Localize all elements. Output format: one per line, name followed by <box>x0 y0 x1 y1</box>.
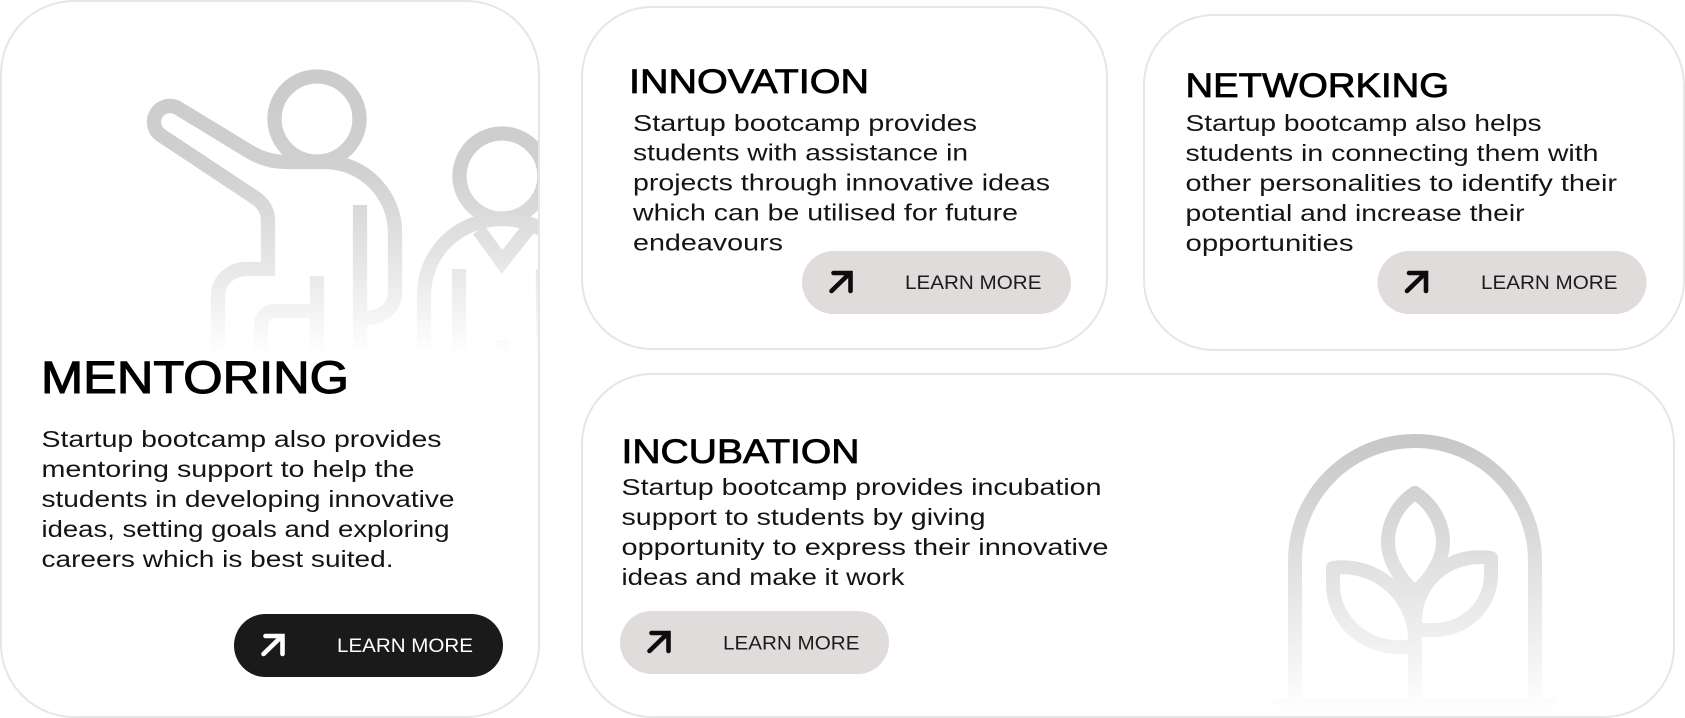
icon: plant under glass dome <box>1272 441 1558 712</box>
button: learn more (dark): LEARN MORE <box>337 635 473 657</box>
panel: incubation <box>582 374 1674 717</box>
text: innovation description: projects through innovative ideas <box>633 170 1050 196</box>
button: learn more: LEARN MORE <box>905 272 1042 294</box>
text: innovation description: which can be utilised for future <box>632 200 1018 226</box>
text: networking description: opportunities <box>1186 230 1354 256</box>
button: learn more <box>620 611 889 674</box>
text: mentoring description <box>42 426 454 572</box>
text: networking description <box>1186 110 1617 256</box>
text: mentoring description: ideas, setting goals and exploring <box>42 516 449 542</box>
text: incubation description: Startup bootcamp provides incubation <box>622 474 1102 500</box>
text: incubation description: support to students by giving <box>622 504 986 530</box>
heading: innovation: INNOVATION <box>629 63 869 101</box>
text: innovation description: endeavours <box>633 230 783 256</box>
text: mentoring description: careers which is best suited. <box>42 546 394 572</box>
button: learn more (dark) <box>234 614 503 677</box>
text: networking description: Startup bootcamp also helps <box>1186 110 1542 136</box>
text: mentoring description: students in developing innovative <box>42 486 454 512</box>
text: networking description: students in connecting them with <box>1186 140 1598 166</box>
text: mentoring description: mentoring support to help the <box>42 456 414 482</box>
text: innovation description <box>632 110 1050 256</box>
text: networking description: other personalities to identify their <box>1186 170 1617 196</box>
text: networking description: potential and increase their <box>1186 200 1525 226</box>
text: incubation description: ideas and make it work <box>622 564 905 590</box>
button: learn more: LEARN MORE <box>1481 272 1618 294</box>
panel: innovation <box>582 7 1107 349</box>
text: incubation description <box>622 474 1108 590</box>
button: learn more <box>1378 251 1646 314</box>
button: learn more <box>802 251 1071 314</box>
text: innovation description: students with assistance in <box>633 140 968 166</box>
panel: mentoring <box>1 1 580 717</box>
heading: incubation: INCUBATION <box>622 433 860 471</box>
heading: mentoring: MENTORING <box>41 352 349 403</box>
button: learn more: LEARN MORE <box>723 632 860 654</box>
icon: mentor and student <box>146 69 538 326</box>
text: innovation description: Startup bootcamp provides <box>633 110 977 136</box>
panel: networking <box>1144 15 1684 350</box>
heading: networking: NETWORKING <box>1186 67 1449 105</box>
text: mentoring description: Startup bootcamp also provides <box>42 426 442 452</box>
text: incubation description: opportunity to express their innovative <box>622 534 1108 560</box>
